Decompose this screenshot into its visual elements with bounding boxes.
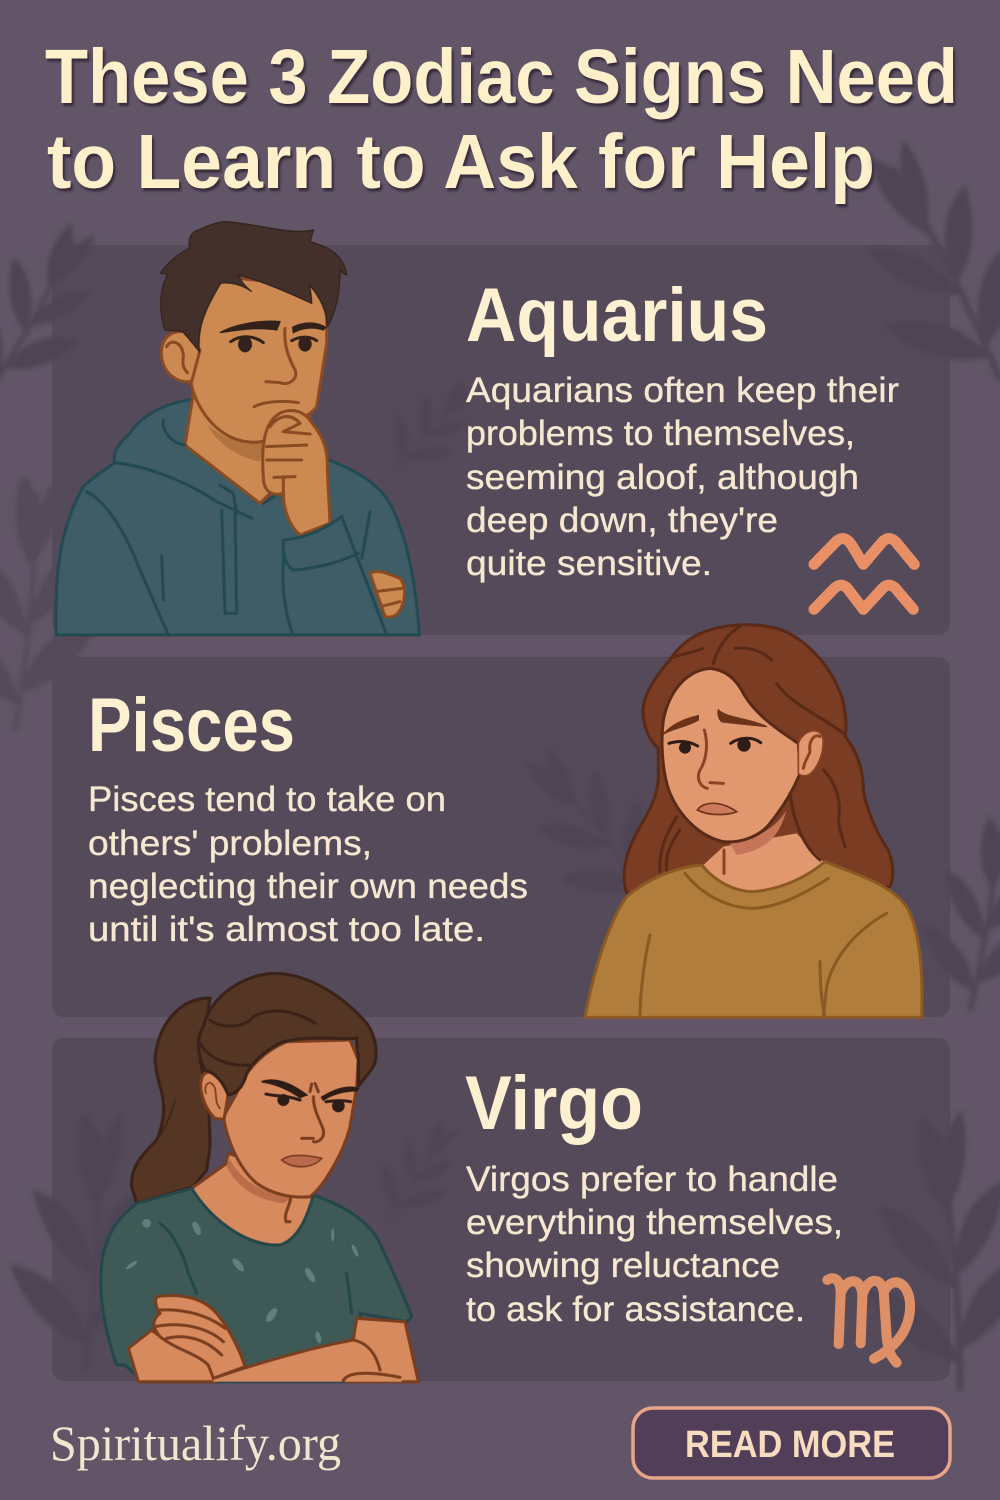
- icon: Aquarius symbol: [814, 539, 914, 609]
- panel: Aquarius: [0, 117, 1000, 635]
- leaf behind figure: [489, 723, 1000, 1018]
- description: Virgo: to ask for assistance.: [466, 1290, 805, 1329]
- description: Aquarius: seeming aloof, although: [466, 458, 859, 497]
- illustration: thoughtful man in teal hoodie: [56, 222, 419, 635]
- title: to Learn to Ask for Help: [47, 119, 875, 205]
- read more button: [633, 1408, 950, 1478]
- panel: Virgo: [8, 973, 1000, 1399]
- description: Virgo: everything themselves,: [466, 1203, 843, 1242]
- description: Virgo: showing reluctance: [466, 1246, 780, 1285]
- footer brand: Spiritualify.org: [50, 1415, 341, 1471]
- description: Pisces: Pisces tend to take on: [88, 780, 446, 819]
- leaves inside Aquarius panel: [0, 117, 1000, 492]
- description: Pisces: until it's almost too late.: [88, 910, 485, 949]
- panel background: [52, 1038, 950, 1381]
- description: Aquarius: deep down, they're: [466, 501, 778, 540]
- description: Pisces: neglecting their own needs: [88, 867, 528, 906]
- title: [45, 34, 958, 205]
- icon: Virgo symbol: [827, 1278, 910, 1363]
- background leaf decoration: [0, 478, 90, 728]
- description: Pisces: others' problems,: [88, 824, 372, 863]
- heading: Aquarius: Aquarius: [466, 273, 768, 358]
- heading: Virgo: Virgo: [465, 1061, 643, 1146]
- read more button: READ MORE: [685, 1424, 895, 1466]
- description: Pisces: [88, 780, 528, 949]
- description: Virgo: [466, 1160, 843, 1329]
- illustration: sad woman in mustard sweater: [585, 625, 922, 1017]
- panel background: [52, 657, 950, 1017]
- description: Aquarius: problems to themselves,: [466, 414, 855, 453]
- panel: Pisces: [52, 625, 1000, 1018]
- illustration: frowning woman with ponytail and crossed arms: [101, 973, 418, 1382]
- description: Aquarius: [466, 371, 899, 583]
- description: Aquarius: Aquarians often keep their: [466, 371, 899, 410]
- heading: Pisces: Pisces: [88, 683, 295, 768]
- description: Aquarius: quite sensitive.: [466, 544, 712, 583]
- description: Virgo: Virgos prefer to handle: [466, 1160, 838, 1199]
- leaves inside Virgo panel: [8, 1105, 1000, 1399]
- panel background: [52, 245, 950, 635]
